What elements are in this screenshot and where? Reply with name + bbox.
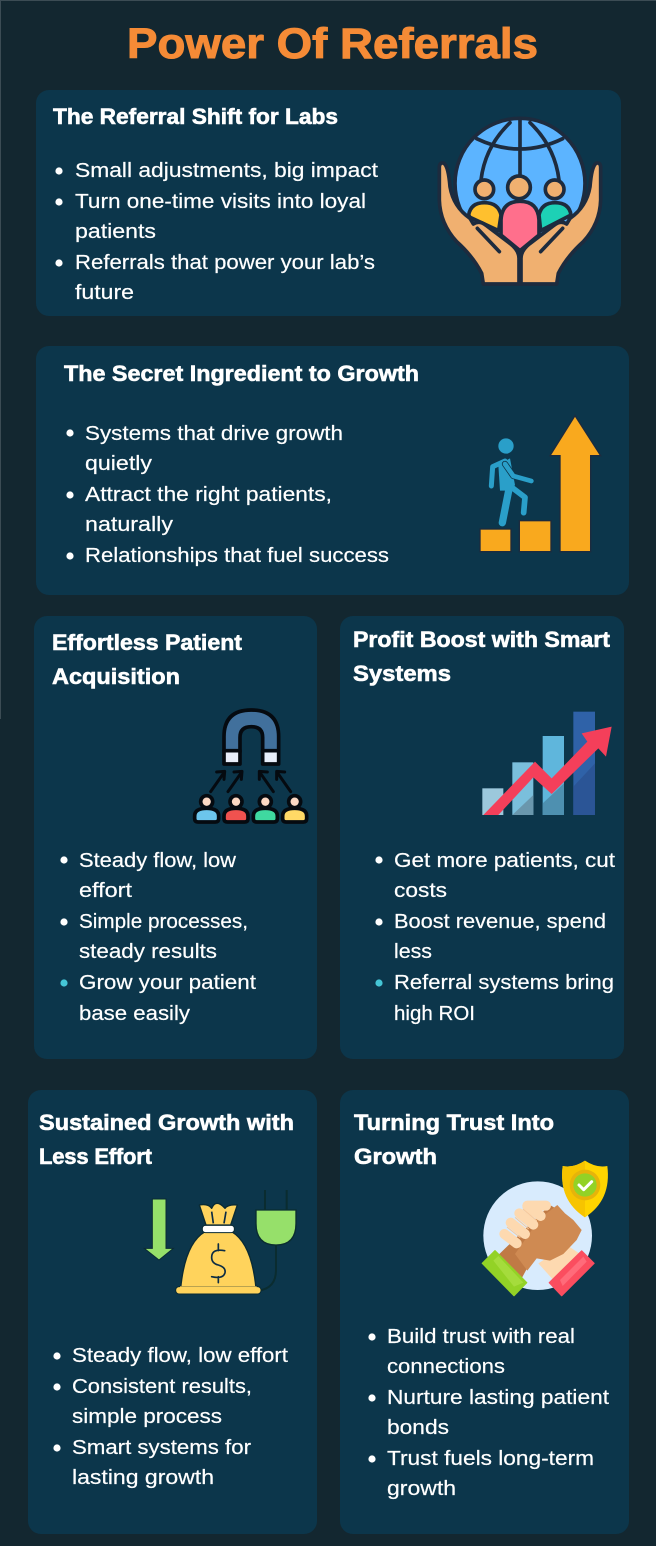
heading: referral shift: The Referral Shift for Labs [53, 104, 338, 129]
bullet list: turning trust: connections [387, 1355, 505, 1378]
icon: handshake with shield [482, 1161, 608, 1296]
bullet list: referral shift: future [75, 281, 134, 304]
bullet list: effortless acquisition: Steady flow, low [79, 849, 236, 872]
bullet list: effortless acquisition: base easily [79, 1002, 191, 1025]
panel: Sustained Growth with Less Effort [28, 1090, 317, 1534]
heading: profit boost: Systems [353, 661, 451, 686]
bullet list: turning trust: growth [387, 1477, 456, 1500]
bullet list: turning trust: Build trust with real [387, 1325, 575, 1348]
bullet list: referral shift: Small adjustments, big impact [75, 159, 378, 182]
bullet list: turning trust: Nurture lasting patient [387, 1386, 609, 1409]
bullet list: sustained growth [53, 1344, 288, 1489]
bullet list: turning trust: bonds [387, 1416, 449, 1439]
panel: Turning Trust Into Growth [340, 1090, 629, 1534]
bullet list: turning trust: Trust fuels long-term [387, 1447, 594, 1470]
heading: profit boost [353, 627, 611, 686]
heading: sustained growth [39, 1110, 294, 1169]
panel: Effortless Patient Acquisition [34, 616, 317, 1059]
bullet list: sustained growth: Smart systems for [72, 1436, 251, 1459]
title: Power Of Referrals [127, 20, 538, 68]
bullet list: referral shift [55, 159, 378, 304]
heading: sustained growth: Sustained Growth with [39, 1110, 294, 1135]
icon: magnet attracting people [195, 710, 307, 822]
bullet list: profit boost: high ROI [394, 1002, 475, 1025]
bullet list: secret ingredient [66, 422, 389, 567]
bullet list: secret ingredient: quietly [85, 452, 153, 475]
bullet list: sustained growth: lasting growth [72, 1466, 214, 1489]
bullet list: profit boost [375, 849, 615, 1025]
heading: sustained growth: Less Effort [39, 1144, 153, 1169]
panel: The Referral Shift for Labs [36, 90, 621, 316]
bullet list: sustained growth: simple process [72, 1405, 222, 1428]
icon: person climbing steps with arrow [480, 416, 601, 552]
heading: effortless acquisition: Effortless Patient [52, 630, 243, 655]
heading: effortless acquisition [52, 630, 243, 689]
panel: Profit Boost with Smart Systems [340, 616, 624, 1059]
icon: down arrow, money bag and plug [144, 1190, 296, 1294]
bullet list: secret ingredient: Attract the right patients, [85, 483, 332, 506]
bullet list: secret ingredient: Systems that drive growth [85, 422, 343, 445]
bullet list: effortless acquisition [60, 849, 256, 1025]
heading: turning trust: Growth [354, 1144, 437, 1169]
bullet list: effortless acquisition: effort [79, 879, 132, 902]
heading: turning trust [354, 1110, 554, 1169]
heading: turning trust: Turning Trust Into [354, 1110, 554, 1135]
bullet list: referral shift: Referrals that power your lab’s [75, 251, 375, 274]
bullet list: referral shift: patients [75, 220, 156, 243]
bullet list: effortless acquisition: Simple processes, [79, 910, 248, 933]
bullet list: referral shift: Turn one-time visits into loyal [75, 190, 366, 213]
bullet list: profit boost: Boost revenue, spend [394, 910, 606, 933]
heading: secret ingredient: The Secret Ingredient to Growth [64, 361, 419, 386]
bullet list: turning trust [368, 1325, 609, 1500]
bullet list: secret ingredient: Relationships that fuel success [85, 544, 389, 567]
bullet list: secret ingredient: naturally [85, 513, 174, 536]
bullet list: profit boost: costs [394, 879, 447, 902]
panel: The Secret Ingredient to Growth [36, 346, 629, 595]
icon: rising bar chart with arrow [482, 712, 612, 815]
bullet list: profit boost: less [394, 940, 432, 963]
bullet list: effortless acquisition: steady results [79, 940, 217, 963]
bullet list: profit boost: Get more patients, cut [394, 849, 615, 872]
icon: hands holding globe with people [439, 118, 601, 284]
heading: effortless acquisition: Acquisition [52, 664, 180, 689]
bullet list: sustained growth: Steady flow, low effort [72, 1344, 288, 1367]
bullet list: effortless acquisition: Grow your patient [79, 971, 256, 994]
bullet list: sustained growth: Consistent results, [72, 1375, 252, 1398]
heading: profit boost: Profit Boost with Smart [353, 627, 611, 652]
bullet list: profit boost: Referral systems bring [394, 971, 614, 994]
